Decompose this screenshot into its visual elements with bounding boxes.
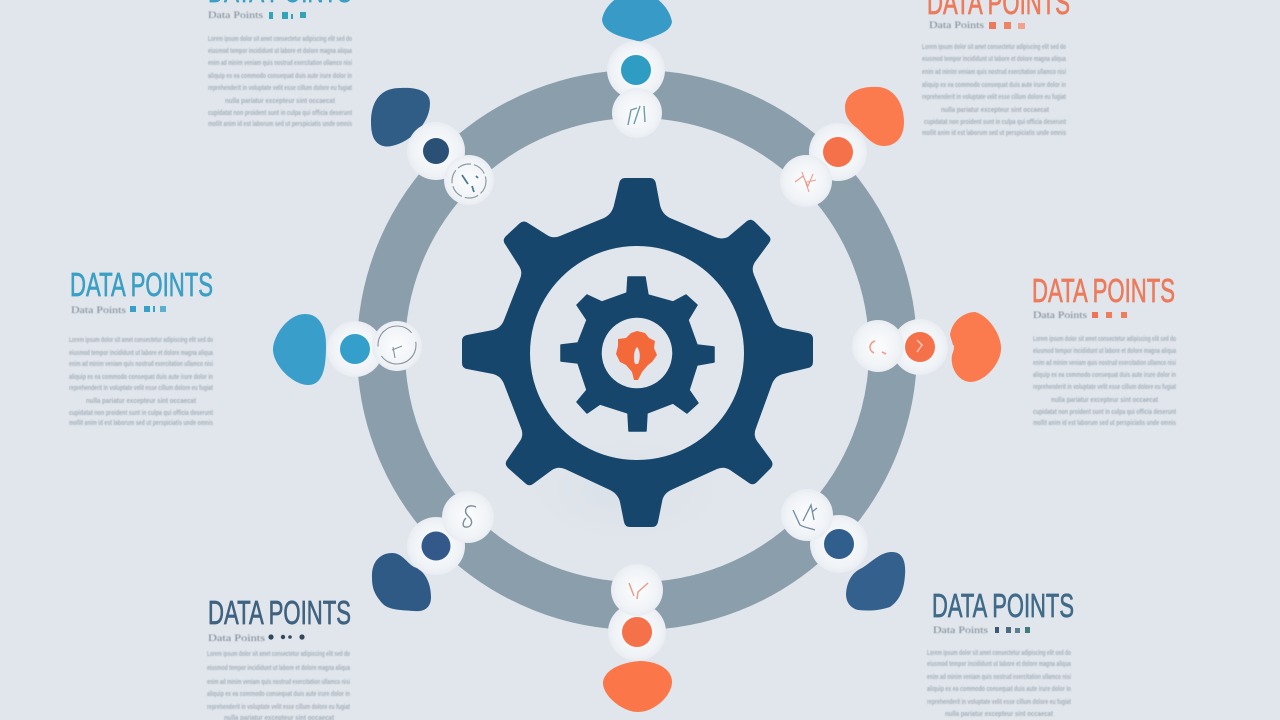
body text: cupidatat non proident sunt in culpa qui officia deserunt bbox=[69, 410, 214, 417]
central gear icon bbox=[462, 178, 813, 527]
body text bbox=[922, 44, 1067, 137]
panel: top right bbox=[922, 0, 1070, 137]
node: upper left bbox=[371, 88, 494, 205]
body text: reprehenderit in voluptate velit esse cillum dolore eu fugiat bbox=[1033, 384, 1176, 391]
subheading with markers: Data Points bbox=[208, 10, 264, 20]
body text bbox=[208, 36, 353, 128]
body text: aliquip ex ea commodo consequat duis aute irure dolor in bbox=[1033, 372, 1176, 379]
body text: mollit anim id est laborum sed ut perspiciatis unde omnis bbox=[208, 121, 352, 128]
body text bbox=[927, 650, 1071, 718]
body text: Lorem ipsum dolor sit amet consectetur adipiscing elit sed do bbox=[922, 44, 1066, 51]
body text bbox=[1033, 336, 1177, 427]
panel: bottom right bbox=[927, 587, 1074, 718]
body text: nulla pariatur excepteur sint occaecat bbox=[1051, 397, 1159, 404]
body text: nulla pariatur excepteur sint occaecat bbox=[86, 398, 197, 405]
body text: eiusmod tempor incididunt ut labore et dolore magna aliqua bbox=[69, 350, 213, 357]
body text: mollit anim id est laborum sed ut perspiciatis unde omnis bbox=[922, 130, 1066, 137]
body text: eiusmod tempor incididunt ut labore et dolore magna aliqua bbox=[922, 56, 1066, 63]
subheading with markers bbox=[933, 625, 1030, 635]
body text: nulla pariatur excepteur sint occaecat bbox=[225, 98, 336, 105]
body text: cupidatat non proident sunt in culpa qui officia deserunt bbox=[1033, 409, 1177, 416]
body text: eiusmod tempor incididunt ut labore et dolore magna aliqua bbox=[927, 661, 1071, 668]
body text: reprehenderit in voluptate velit esse cillum dolore eu fugiat bbox=[207, 704, 350, 711]
body text: enim ad minim veniam quis nostrud exercitation ullamco nisi bbox=[69, 361, 213, 368]
body text: enim ad minim veniam quis nostrud exercitation ullamco nisi bbox=[922, 69, 1066, 76]
body text: aliquip ex ea commodo consequat duis aute irure dolor in bbox=[208, 73, 352, 80]
heading: DATA POINTS bbox=[208, 594, 351, 631]
subheading with markers: Data Points bbox=[71, 305, 127, 315]
grey ring bbox=[381, 94, 893, 606]
body text: mollit anim id est laborum sed ut perspiciatis unde omnis bbox=[69, 420, 213, 427]
subheading with markers bbox=[1033, 310, 1127, 320]
subheading with markers: Data Points bbox=[208, 633, 266, 643]
heading: DATA POINTS bbox=[932, 587, 1074, 624]
top blob bbox=[602, 0, 672, 42]
node: bottom bbox=[603, 564, 672, 712]
body text: eiusmod tempor incididunt ut labore et dolore magna aliqua bbox=[208, 48, 352, 55]
node: left bbox=[273, 314, 422, 385]
body text: reprehenderit in voluptate velit esse cillum dolore eu fugiat bbox=[922, 94, 1066, 101]
body text: nulla pariatur excepteur sint occaecat bbox=[941, 107, 1050, 114]
node: top bbox=[602, 0, 672, 138]
subheading with markers bbox=[929, 20, 1025, 30]
node: right bbox=[852, 312, 1001, 382]
body text: aliquip ex ea commodo consequat duis aute irure dolor in bbox=[207, 691, 350, 698]
orange centre emblem bbox=[616, 331, 657, 380]
body text: cupidatat non proident sunt in culpa qui officia deserunt bbox=[924, 119, 1067, 126]
node: lower left bbox=[372, 491, 494, 611]
body text: aliquip ex ea commodo consequat duis aute irure dolor in bbox=[69, 374, 213, 381]
heading: DATA POINTS bbox=[70, 266, 213, 303]
panel: top left bbox=[208, 0, 353, 128]
node: lower right bbox=[781, 489, 905, 611]
node: upper right bbox=[780, 87, 904, 207]
body text: reprehenderit in voluptate velit esse cillum dolore eu fugiat bbox=[69, 385, 213, 392]
heading: DATA POINTS bbox=[1032, 272, 1175, 309]
body text: aliquip ex ea commodo consequat duis aute irure dolor in bbox=[927, 686, 1071, 693]
body text: enim ad minim veniam quis nostrud exercitation ullamco nisi bbox=[927, 674, 1071, 681]
body text: Lorem ipsum dolor sit amet consectetur adipiscing elit sed do bbox=[69, 337, 213, 344]
subheading with markers: Data Points bbox=[929, 20, 985, 30]
body text: eiusmod tempor incididunt ut labore et dolore magna aliqua bbox=[1033, 348, 1176, 355]
body text: enim ad minim veniam quis nostrud exercitation ullamco nisi bbox=[1033, 360, 1176, 367]
subheading with markers bbox=[208, 10, 306, 20]
panel: bottom left bbox=[207, 594, 351, 720]
body text: Lorem ipsum dolor sit amet consectetur adipiscing elit sed do bbox=[927, 650, 1071, 657]
body text: eiusmod tempor incididunt ut labore et dolore magna aliqua bbox=[207, 665, 350, 672]
subheading with markers bbox=[208, 633, 305, 643]
body text: Lorem ipsum dolor sit amet consectetur adipiscing elit sed do bbox=[208, 36, 352, 43]
subheading with markers: Data Points bbox=[1033, 310, 1088, 320]
body text: reprehenderit in voluptate velit esse cillum dolore eu fugiat bbox=[208, 85, 352, 92]
body text: reprehenderit in voluptate velit esse cillum dolore eu fugiat bbox=[927, 699, 1071, 706]
small gear bbox=[561, 277, 714, 431]
body text bbox=[207, 651, 350, 720]
body text: mollit anim id est laborum sed ut perspiciatis unde omnis bbox=[1033, 420, 1176, 427]
body text: enim ad minim veniam quis nostrud exercitation ullamco nisi bbox=[207, 679, 350, 686]
panel: left bbox=[69, 266, 214, 427]
body text: aliquip ex ea commodo consequat duis aute irure dolor in bbox=[922, 82, 1066, 89]
panel: right bbox=[1032, 272, 1177, 427]
body text: Lorem ipsum dolor sit amet consectetur adipiscing elit sed do bbox=[207, 651, 350, 658]
subheading with markers: Data Points bbox=[933, 625, 989, 635]
body text: cupidatat non proident sunt in culpa qui officia deserunt bbox=[208, 110, 353, 117]
large gear bbox=[462, 178, 813, 527]
subheading with markers bbox=[71, 305, 166, 315]
body text: enim ad minim veniam quis nostrud exercitation ullamco nisi bbox=[208, 60, 352, 67]
body text: nulla pariatur excepteur sint occaecat bbox=[945, 711, 1054, 718]
body text: Lorem ipsum dolor sit amet consectetur adipiscing elit sed do bbox=[1033, 336, 1176, 343]
gear shadow bbox=[495, 420, 755, 560]
body text bbox=[69, 337, 214, 427]
